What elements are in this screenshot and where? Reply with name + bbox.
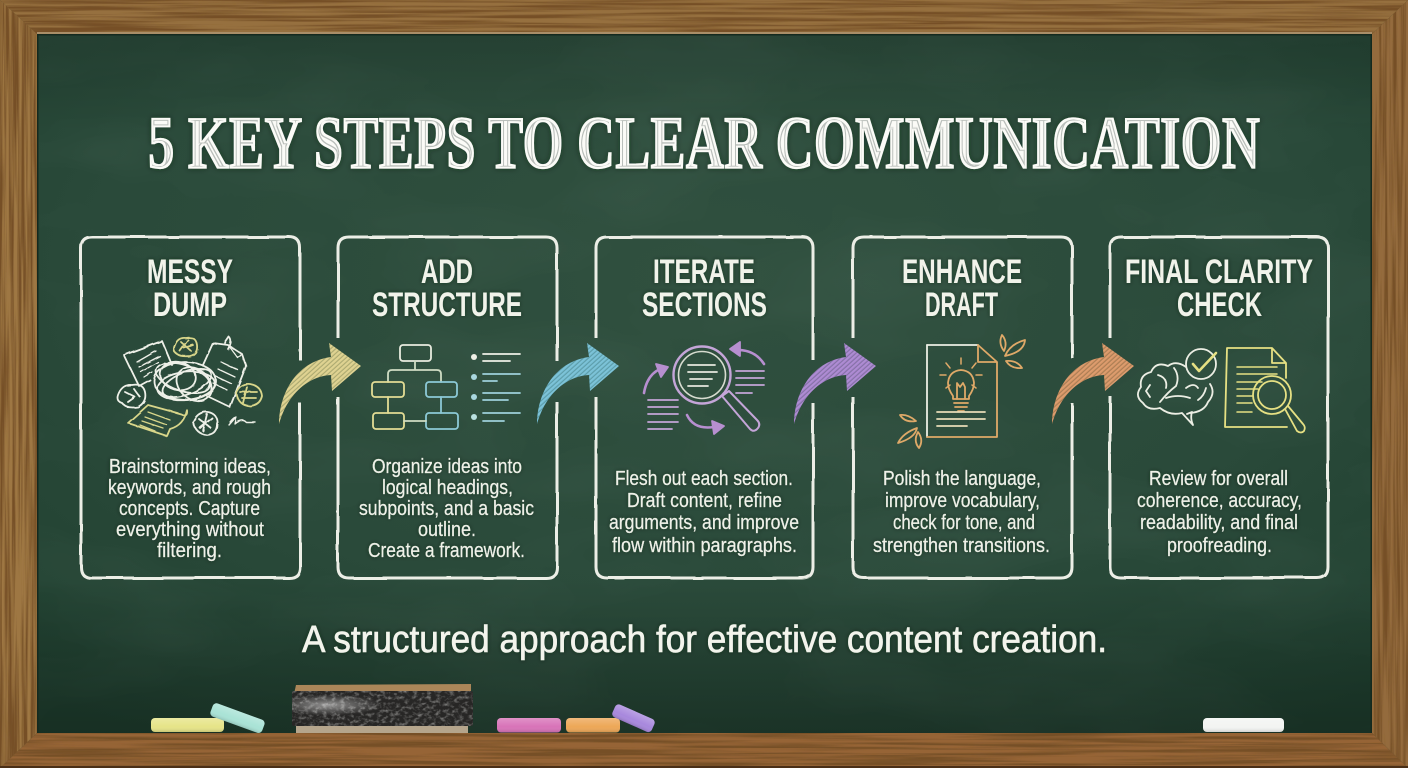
description: arguments, and improve [609, 511, 799, 534]
chalk: light blue [209, 702, 266, 734]
icon: tangled scribble, papers and crumpled notes [118, 337, 262, 436]
description: coherence, accuracy, [1137, 489, 1302, 512]
description: improve vocabulary, [885, 489, 1040, 512]
description: readability, and final [1140, 511, 1298, 534]
description: check for tone, and [893, 511, 1035, 534]
description [108, 455, 271, 562]
card border [1110, 237, 1328, 578]
description [873, 467, 1050, 557]
card: iterate sections [596, 237, 813, 578]
card border [853, 237, 1072, 578]
chalk: pink [497, 718, 561, 732]
chalk: white [1203, 718, 1284, 732]
card border [338, 237, 557, 578]
description: Review for overall [1149, 467, 1288, 490]
card: messy dump [81, 237, 300, 578]
description: proofreading. [1167, 534, 1272, 557]
icon: flowchart and bullet list [372, 345, 520, 429]
description: everything without [116, 518, 264, 541]
card border [81, 237, 300, 578]
card: add structure [338, 237, 557, 578]
description: strengthen transitions. [873, 534, 1050, 557]
description [609, 467, 799, 557]
heading: ITERATE [653, 253, 755, 291]
description [359, 455, 534, 562]
arrow: add structure to iterate sections [537, 343, 619, 424]
arrow: iterate sections to enhance draft [794, 343, 876, 424]
heading [147, 253, 233, 324]
description: Polish the language, [883, 467, 1041, 490]
heading: MESSY [147, 253, 233, 291]
tagline: A structured approach for effective content creation. [302, 619, 1107, 661]
arrow: messy dump to add structure [279, 343, 361, 424]
heading: SECTIONS [642, 286, 767, 324]
chalk: purple [611, 703, 656, 733]
description: flow within paragraphs. [612, 534, 797, 557]
arrow: enhance draft to final clarity check [1052, 343, 1134, 424]
description: filtering. [157, 539, 222, 562]
heading: DRAFT [925, 286, 998, 324]
description: logical headings, [382, 476, 513, 499]
description [1137, 467, 1302, 557]
heading [902, 253, 1022, 324]
description: concepts. Capture [119, 497, 260, 520]
heading: STRUCTURE [372, 286, 522, 324]
icon: magnifier with iteration arrows [644, 342, 764, 434]
heading: CHECK [1177, 286, 1262, 324]
description: Draft content, refine [627, 489, 782, 512]
description: subpoints, and a basic [359, 497, 534, 520]
heading: ADD [421, 253, 473, 291]
description: outline. [418, 518, 476, 541]
eraser [292, 684, 473, 733]
card border [596, 237, 813, 578]
card: final clarity check [1110, 237, 1328, 578]
description: Brainstorming ideas, [109, 455, 271, 478]
card: enhance draft [853, 237, 1072, 578]
description: Create a framework. [368, 539, 525, 562]
description: Flesh out each section. [615, 467, 793, 490]
chalk: orange [566, 718, 620, 732]
heading: DUMP [153, 286, 227, 324]
heading: ENHANCE [902, 253, 1022, 291]
icon: brain with check mark and document under magnifier [1138, 348, 1305, 432]
heading [1125, 253, 1313, 324]
heading: FINAL CLARITY [1125, 253, 1313, 291]
icon: document with light bulb and sparks [898, 335, 1025, 448]
description: keywords, and rough [108, 476, 271, 499]
heading [372, 253, 522, 324]
heading [642, 253, 767, 324]
description: Organize ideas into [372, 455, 522, 478]
chalk: yellow [151, 718, 224, 732]
